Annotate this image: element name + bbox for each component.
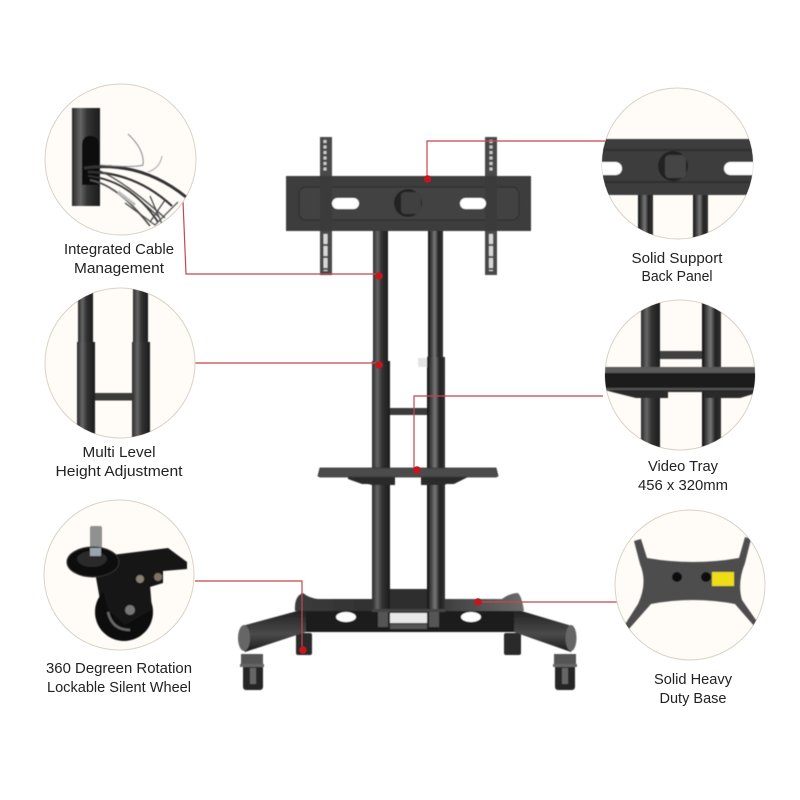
base leg right	[508, 607, 576, 652]
label: Solid Heavy	[654, 672, 733, 688]
base leg left	[238, 607, 312, 652]
base body	[295, 589, 524, 632]
panel: video tray	[600, 295, 760, 494]
circle background	[602, 88, 753, 239]
tray brackets	[348, 477, 468, 485]
detail image: caster wheel	[67, 526, 187, 641]
detail image: pole with cables	[72, 108, 186, 226]
circle background	[44, 500, 194, 650]
label: Back Panel	[642, 269, 712, 285]
line: cable management	[183, 201, 379, 274]
panel: height adjustment	[45, 285, 195, 480]
VESA bracket strips	[320, 137, 497, 275]
label: Lockable Silent Wheel	[47, 680, 191, 696]
label: Duty Base	[660, 691, 726, 707]
panel: cable management	[45, 84, 196, 277]
line: height adjustment	[195, 362, 379, 364]
detail image: support panel	[602, 138, 753, 238]
line: video tray	[414, 396, 603, 470]
upper poles	[373, 231, 443, 367]
line: back panel	[427, 141, 606, 179]
line: base	[478, 601, 618, 603]
detail image: base underside	[624, 537, 758, 630]
wheel: right inner	[504, 633, 521, 655]
circle background	[45, 288, 195, 438]
circle background	[45, 84, 196, 235]
panel: wheel	[44, 500, 194, 696]
callout lines and dots	[183, 141, 618, 650]
panel: back panel	[602, 88, 754, 281]
label: 360 Degreen Rotation	[46, 661, 192, 677]
label: Video Tray	[648, 459, 719, 475]
label: Integrated Cable	[64, 242, 174, 258]
label: Solid Support	[632, 251, 722, 267]
wheel: left inner	[296, 633, 312, 655]
label: Height Adjustment	[56, 464, 182, 480]
detail image: tray close-up	[605, 302, 755, 448]
label: Multi Level	[82, 445, 156, 461]
panel: base	[615, 510, 765, 707]
wheel: left outer	[240, 654, 264, 690]
video tray	[318, 468, 498, 477]
circle background	[615, 510, 765, 660]
line: wheel	[195, 581, 302, 650]
product: mobile TV stand	[238, 137, 577, 690]
circle background	[605, 300, 755, 450]
lower poles	[372, 357, 445, 627]
label: Management	[74, 261, 164, 277]
callout dots	[299, 175, 482, 654]
detail image: telescopic poles	[77, 285, 150, 442]
wheel: right outer	[553, 654, 577, 690]
label: 456 x 320mm	[638, 478, 728, 494]
crossbar	[390, 408, 427, 415]
back panel	[286, 176, 531, 231]
